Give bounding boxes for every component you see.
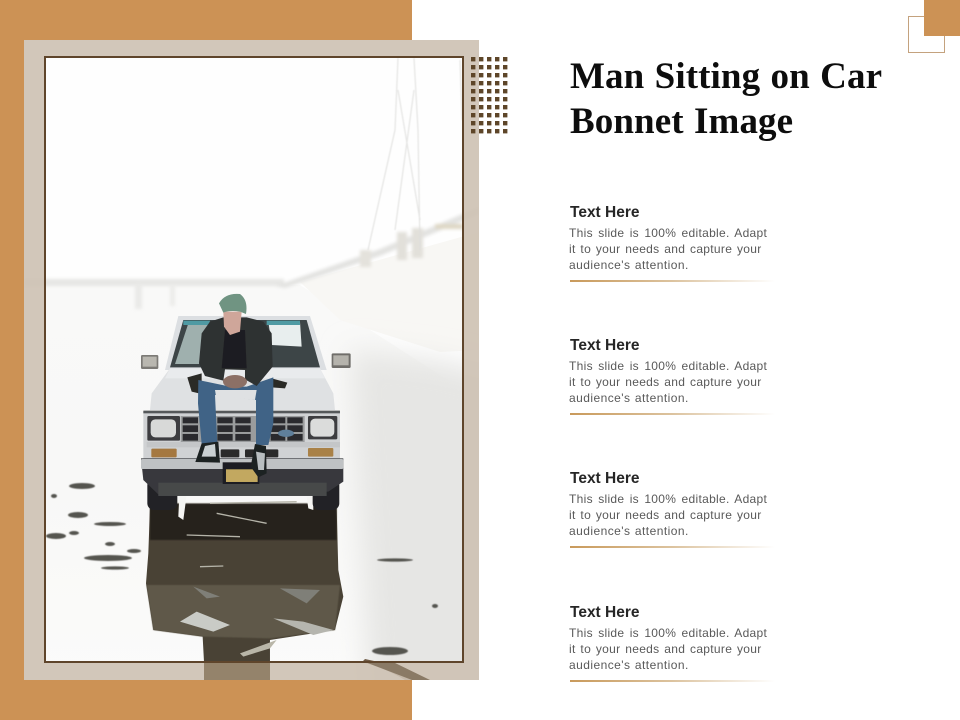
text block 3: Text Here bbox=[570, 470, 640, 487]
text block 3: it to your needs and capture your bbox=[569, 508, 762, 522]
text block 1: This slide is 100% editable. Adapt bbox=[569, 226, 767, 240]
jacket bbox=[199, 317, 273, 386]
text block 2: audience's attention. bbox=[569, 391, 689, 405]
title: Man Sitting on Car bbox=[570, 56, 882, 97]
indicators bbox=[151, 449, 177, 457]
hands bbox=[223, 375, 247, 388]
dot grid bbox=[471, 57, 508, 134]
head and hair bbox=[223, 312, 242, 335]
text block 3: This slide is 100% editable. Adapt bbox=[569, 492, 767, 506]
corner filled square bbox=[924, 0, 960, 36]
bridge in the distance bbox=[24, 279, 284, 286]
water and road bbox=[24, 285, 479, 680]
text block 4: Text Here bbox=[570, 604, 640, 621]
text block 3: audience's attention. bbox=[569, 524, 689, 538]
text block 2 bbox=[569, 337, 767, 415]
cab bbox=[165, 316, 327, 370]
beige frame overlay bbox=[24, 40, 479, 680]
mirrors bbox=[141, 355, 158, 369]
text block 1: audience's attention. bbox=[569, 258, 689, 272]
branch in frame band bbox=[365, 662, 430, 680]
title: Bonnet Image bbox=[570, 100, 793, 142]
sneakers bbox=[195, 442, 220, 463]
text block 2: This slide is 100% editable. Adapt bbox=[569, 359, 767, 373]
title bbox=[570, 56, 882, 142]
grille body bbox=[143, 411, 340, 461]
bag under man bbox=[187, 373, 287, 394]
debris left bbox=[46, 483, 438, 655]
corner outline square bbox=[908, 16, 944, 52]
text block 1 bbox=[569, 204, 767, 282]
reflection of the truck bbox=[146, 501, 344, 661]
jeans bbox=[198, 377, 273, 445]
text block 2: Text Here bbox=[570, 337, 640, 354]
bumper bbox=[141, 458, 343, 496]
hood bbox=[150, 368, 335, 410]
text block 2: it to your needs and capture your bbox=[569, 375, 762, 389]
text block 4: This slide is 100% editable. Adapt bbox=[569, 626, 767, 640]
text block 4: it to your needs and capture your bbox=[569, 642, 762, 656]
text block 1: it to your needs and capture your bbox=[569, 242, 762, 256]
panel: tan background block bbox=[0, 0, 412, 720]
text block 4: audience's attention. bbox=[569, 658, 689, 672]
text block 3 bbox=[569, 470, 767, 548]
text block 4 bbox=[569, 604, 767, 682]
truck and man bbox=[141, 294, 351, 510]
licence plate bbox=[223, 462, 259, 484]
text block 1: Text Here bbox=[570, 204, 640, 221]
inner frame line bbox=[45, 57, 463, 662]
wheels bbox=[147, 484, 178, 510]
windshield bbox=[170, 320, 320, 367]
pylon bbox=[368, 58, 462, 250]
reflection in frame band bbox=[204, 662, 270, 680]
